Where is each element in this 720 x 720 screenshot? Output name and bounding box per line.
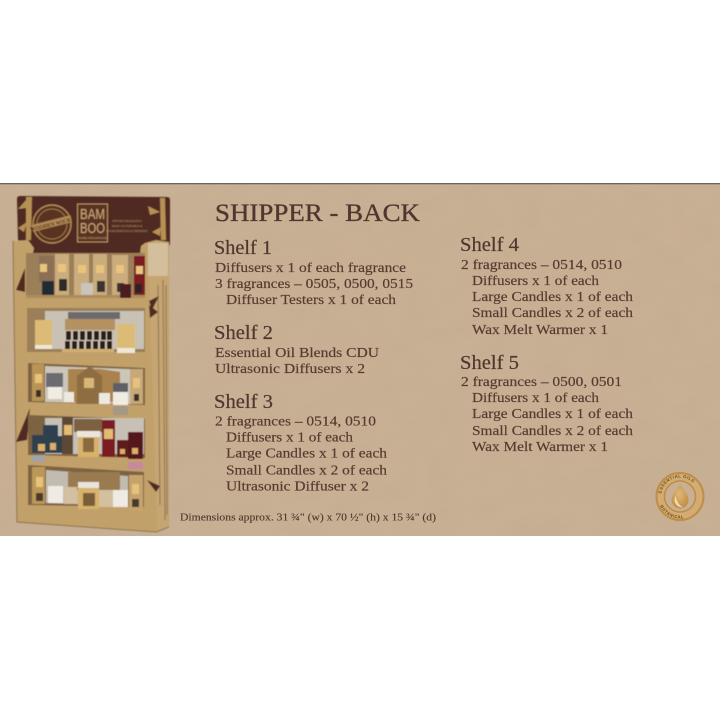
shelf 2 bbox=[27, 308, 145, 353]
right text column bbox=[460, 235, 633, 454]
shelf 5 bbox=[28, 465, 144, 511]
shelf 5 text: 2 fragrances – 0500, 0501 bbox=[461, 374, 622, 389]
shelf 2 text: Ultrasonic Diffusers x 2 bbox=[215, 361, 365, 376]
shelf 4 text: Wax Melt Warmer x 1 bbox=[472, 322, 608, 337]
shelf 2 text: Essential Oil Blends CDU bbox=[215, 345, 379, 360]
shelf 4 text: Shelf 4 bbox=[460, 235, 519, 256]
shelf 4 text: 2 fragrances – 0514, 0510 bbox=[461, 257, 622, 272]
shelf 5 text: Diffusers x 1 of each bbox=[472, 390, 599, 405]
display header: BAM bbox=[80, 206, 105, 223]
shelf 1 text bbox=[214, 238, 413, 307]
shelf 3 bbox=[28, 363, 145, 415]
display header: INFUSED FRAGRANCE bbox=[112, 220, 142, 223]
dimensions note: Dimensions approx. 31 ¾" (w) x 70 ½" (h) x 15 ¾" (d) bbox=[180, 512, 437, 524]
shelf 2 text bbox=[214, 323, 379, 376]
shelf 4 text: Diffusers x 1 of each bbox=[472, 273, 599, 288]
background panel bbox=[0, 183, 720, 536]
display header bbox=[17, 196, 170, 254]
shelf 5 text: Shelf 5 bbox=[460, 353, 519, 374]
shelf 2 text: Shelf 2 bbox=[214, 323, 273, 344]
shelf 4 text: Small Candles x 2 of each bbox=[472, 305, 633, 320]
icon: essential oil seal bbox=[656, 472, 704, 521]
shelf 1 bbox=[26, 253, 145, 298]
shelf 5 text bbox=[460, 353, 633, 454]
shelf 5 text: Wax Melt Warmer x 1 bbox=[472, 439, 608, 454]
shelf 5 text: Small Candles x 2 of each bbox=[472, 423, 633, 438]
icon: essential oil seal: ESSENTIAL OILS bbox=[658, 474, 694, 494]
shelf 3 text: Diffusers x 1 of each bbox=[226, 430, 353, 444]
display header: BOO bbox=[80, 220, 105, 237]
display header: ENVIRONMENTALLY FRIENDLY bbox=[106, 230, 148, 233]
display header: WOODEN WICKS bbox=[30, 217, 75, 233]
display shipper illustration bbox=[13, 196, 170, 532]
display header: HOME FRAGRANCE bbox=[78, 236, 107, 240]
shelf 1 text: 3 fragrances – 0505, 0500, 0515 bbox=[215, 276, 413, 291]
shelf 3 text: Small Candles x 2 of each bbox=[226, 462, 387, 478]
shelf 3 text bbox=[214, 392, 387, 494]
display header: MADE SUSTAINABLE & bbox=[112, 225, 143, 228]
shelf 3 text: Large Candles x 1 of each bbox=[226, 446, 387, 460]
shelf 4 text: Large Candles x 1 of each bbox=[472, 289, 633, 304]
shelf 1 text: Diffusers x 1 of each fragrance bbox=[215, 260, 406, 275]
shelf 3 text: Ultrasonic Diffuser x 2 bbox=[226, 478, 369, 494]
shelf 4 bbox=[28, 415, 145, 469]
title: SHIPPER - BACK bbox=[215, 198, 421, 227]
shelf 1 text: Diffuser Testers x 1 of each bbox=[226, 292, 396, 307]
shelf 3 text: Shelf 3 bbox=[214, 392, 273, 413]
shelf 3 text: 2 fragrances – 0514, 0510 bbox=[215, 414, 376, 428]
shelf 1 text: Shelf 1 bbox=[214, 238, 272, 259]
left text column bbox=[214, 238, 413, 494]
icon: essential oil seal: BOTANICAL bbox=[660, 504, 684, 518]
display body bbox=[13, 240, 169, 532]
shelf 4 text bbox=[460, 235, 633, 337]
shelf 5 text: Large Candles x 1 of each bbox=[472, 406, 633, 421]
